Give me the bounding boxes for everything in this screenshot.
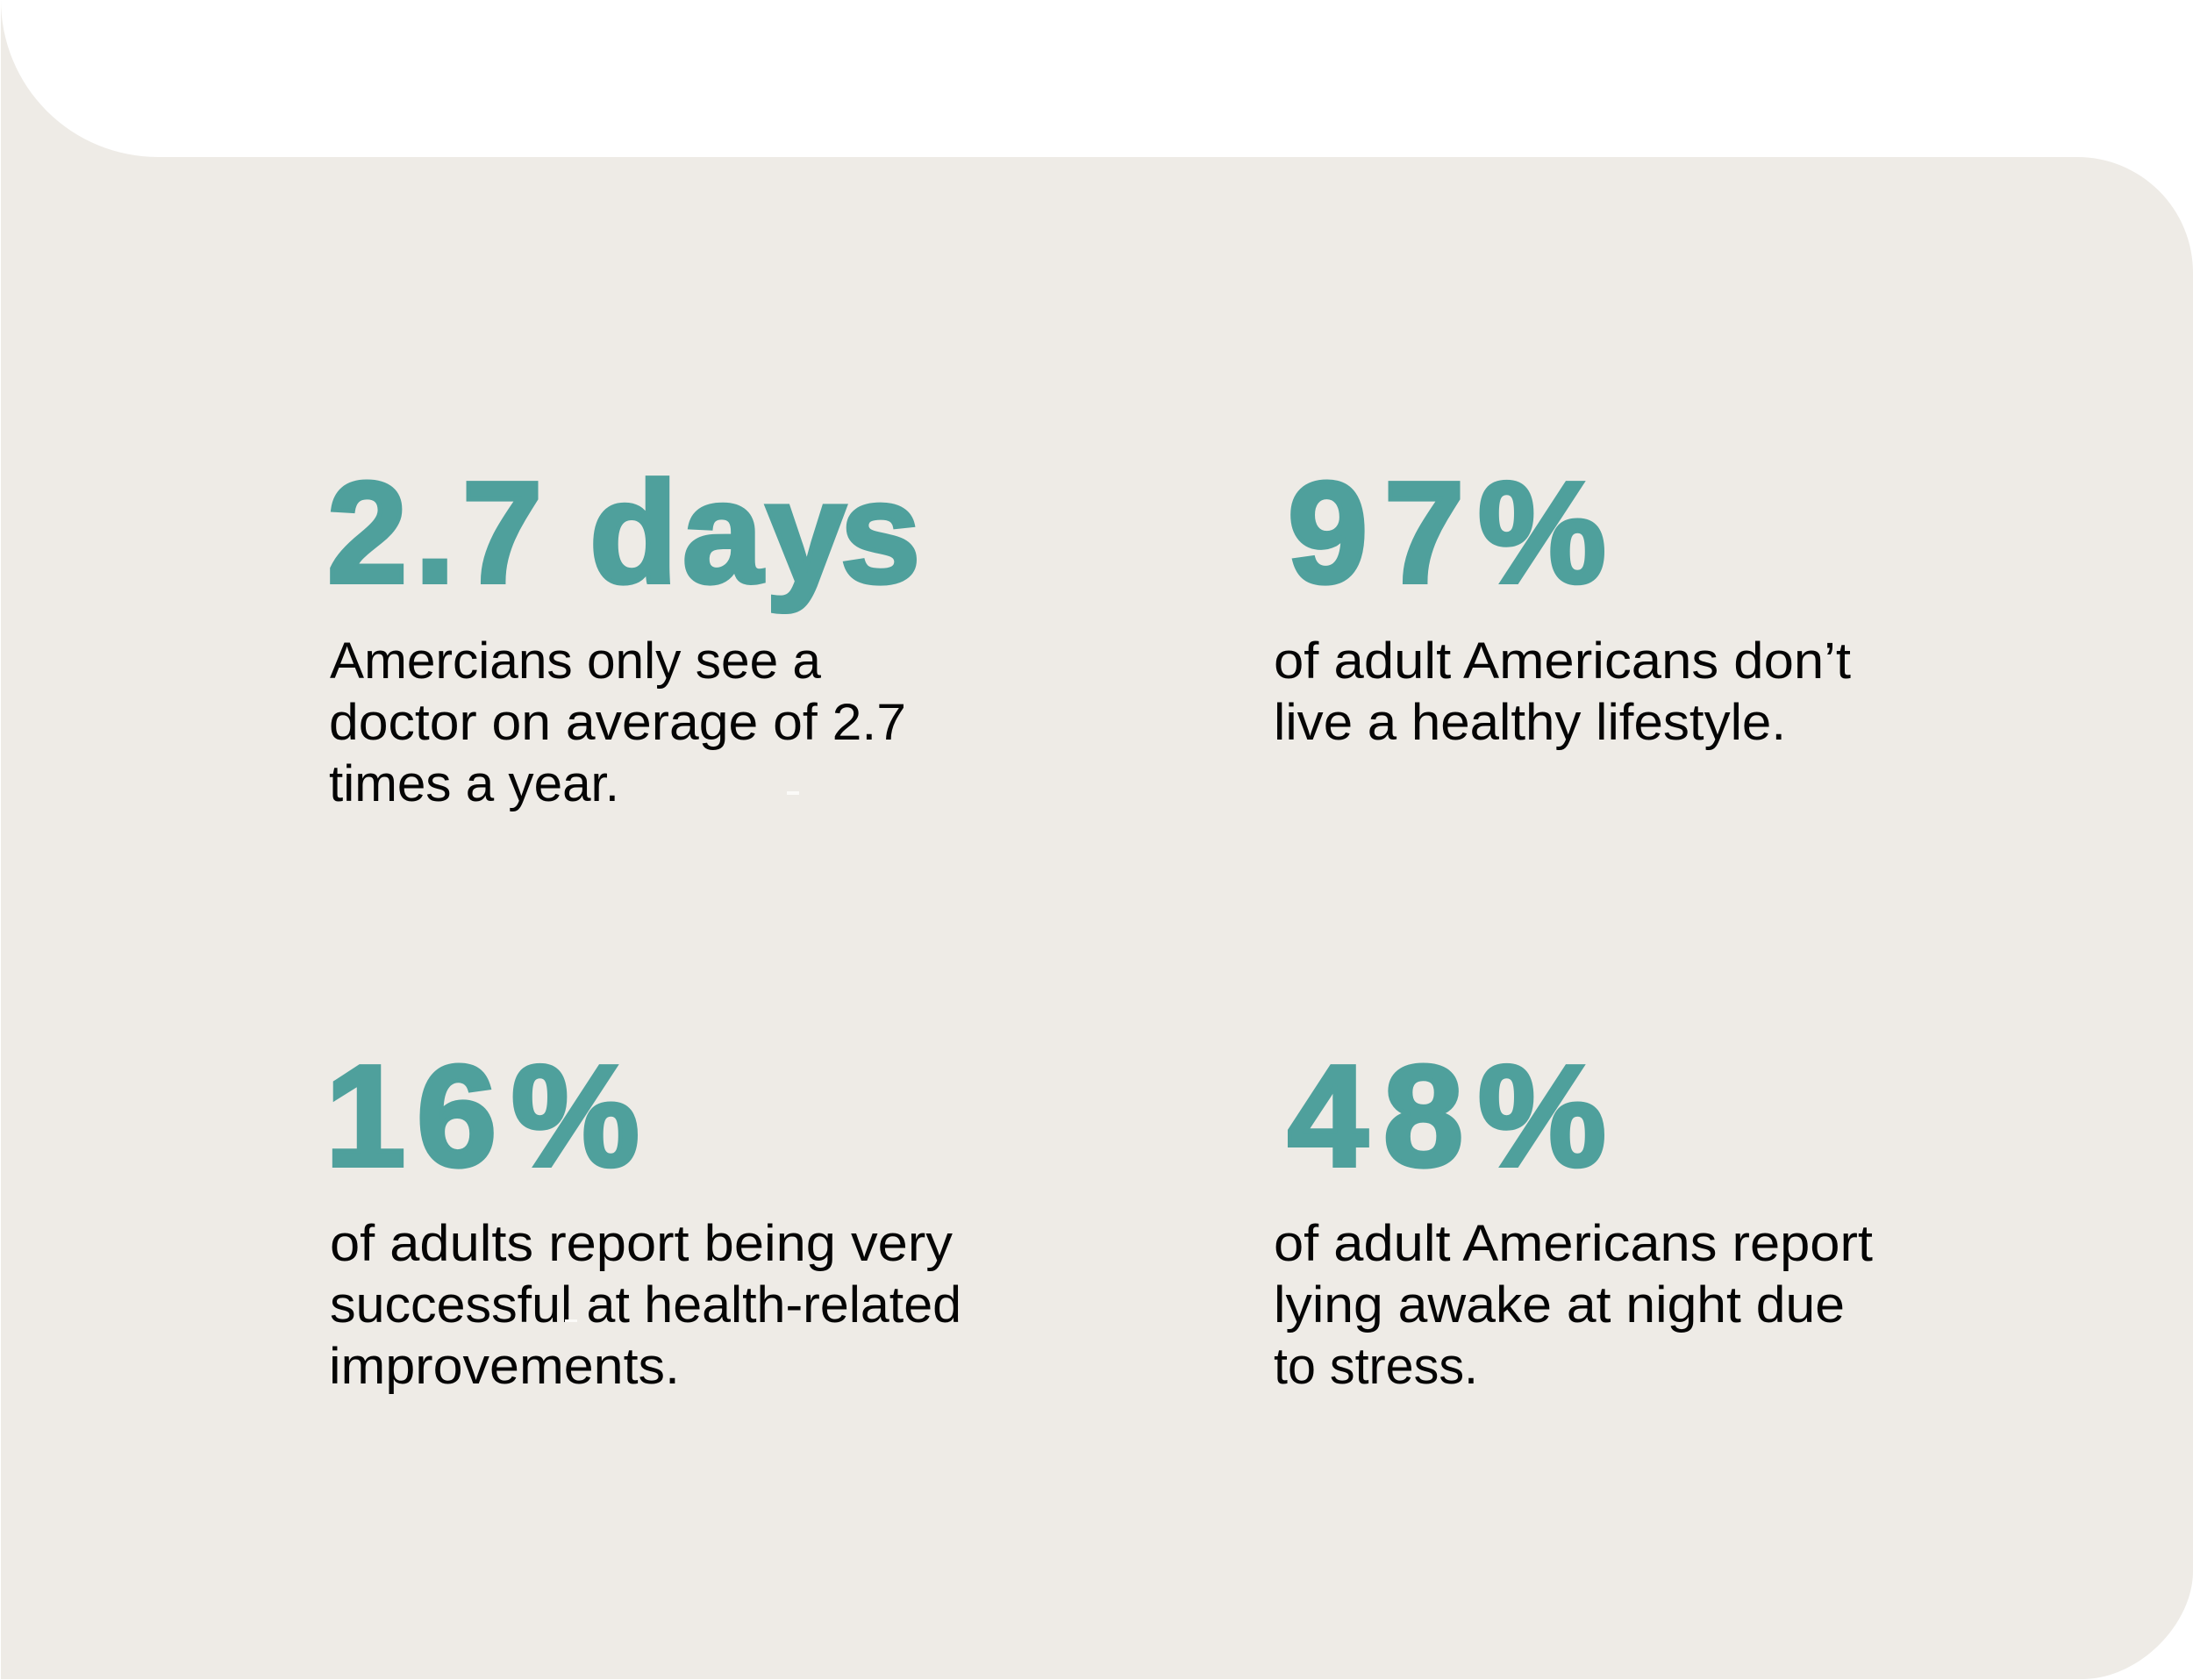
- heading: 16%: 16%: [325, 1035, 639, 1197]
- heading: 48%: 48%: [1288, 1035, 1606, 1197]
- description: health-related improvements: of adults report being very: [330, 1215, 953, 1272]
- small white dash mark: [787, 791, 799, 795]
- stat: 48%: [1274, 1035, 1873, 1395]
- description: healthy lifestyle: of adult Americans don’t: [1274, 633, 1851, 690]
- description: health-related improvements: successful at health-related: [330, 1276, 961, 1333]
- description: doctor visits: doctor on average of 2.7: [329, 694, 906, 751]
- stat: 16%: [325, 1035, 961, 1395]
- description: lying awake from stress: [1274, 1215, 1873, 1395]
- description: lying awake from stress: to stress.: [1274, 1338, 1478, 1395]
- stat: 97%: [1274, 453, 1851, 751]
- description: doctor visits: Amercians only see a: [330, 633, 822, 690]
- description: healthy lifestyle: live a healthy lifestyle.: [1274, 694, 1786, 751]
- description: doctor visits: [329, 633, 906, 812]
- description: doctor visits: times a year.: [329, 755, 619, 812]
- heading: 97%: 97%: [1288, 453, 1606, 612]
- description: lying awake from stress: lying awake at night due: [1274, 1276, 1845, 1333]
- description: healthy lifestyle: [1274, 633, 1851, 751]
- description: health-related improvements: improvements.: [329, 1338, 680, 1395]
- description: lying awake from stress: of adult Americans report: [1274, 1215, 1873, 1272]
- small white dash mark: [565, 1319, 577, 1322]
- heading: 2.7 days: 2.7 days: [327, 453, 920, 612]
- stat: 2.7 days: [327, 453, 920, 812]
- description: health-related improvements: [329, 1215, 961, 1395]
